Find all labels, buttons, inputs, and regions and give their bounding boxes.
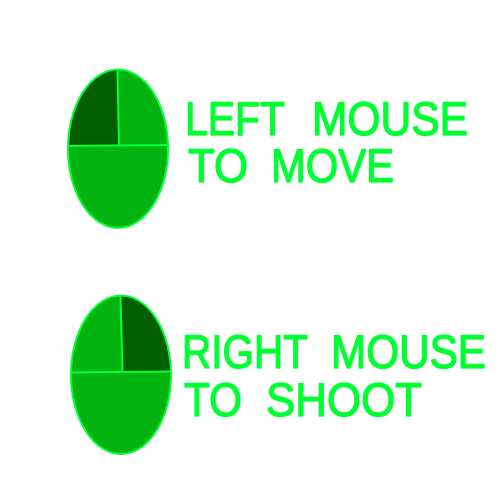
label: left mouse to move: MOVE (271, 139, 394, 192)
label: left mouse to move: MOUSE (312, 92, 468, 145)
label: right mouse to shoot: SHOOT (266, 373, 422, 426)
panel: left mouse instruction (60, 60, 468, 228)
label: right mouse to shoot: MOUSE (331, 325, 486, 378)
icon: mouse with right button highlighted (70, 294, 172, 455)
label: right mouse to shoot: TO (184, 373, 242, 426)
label: left mouse to move (185, 92, 468, 192)
panel: right mouse instruction (71, 285, 486, 454)
label: left mouse to move: TO (188, 139, 248, 192)
left button highlighted (69, 70, 118, 145)
label: right mouse to shoot: RIGHT (182, 325, 308, 378)
icon: mouse with left button highlighted (60, 60, 168, 228)
label: left mouse to move: LEFT (185, 92, 285, 145)
right button highlighted (122, 296, 170, 371)
label: right mouse to shoot (182, 325, 486, 426)
infographic canvas (67, 68, 485, 455)
